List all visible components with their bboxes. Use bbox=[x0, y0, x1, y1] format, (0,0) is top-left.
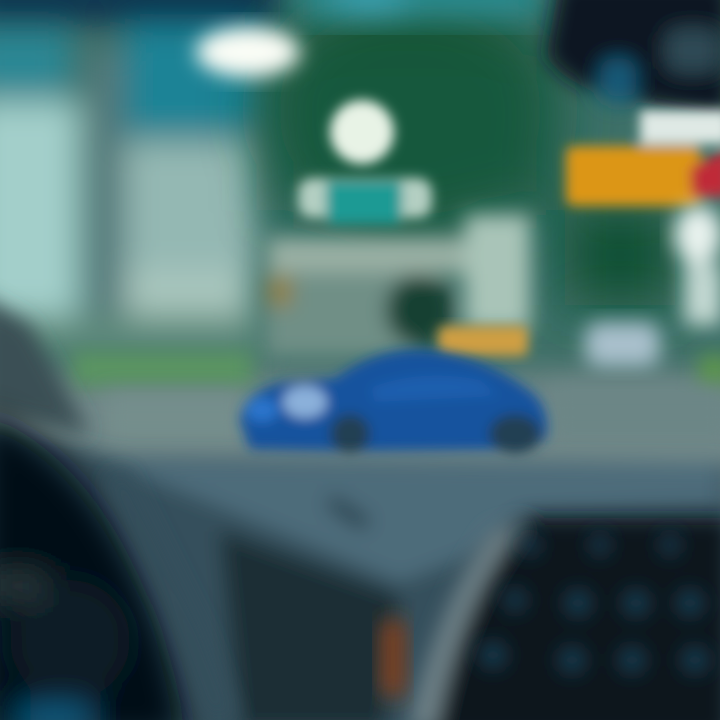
overhead white light bbox=[196, 27, 300, 77]
yellow sign behind car bbox=[438, 326, 528, 356]
round white street sign bbox=[330, 100, 394, 164]
left pillar grey shape bbox=[0, 295, 90, 435]
rear-view mirror dark shape bbox=[546, 0, 720, 118]
background: sky and street base bbox=[0, 0, 720, 505]
building: left facade bbox=[0, 0, 280, 355]
orange and red sign bbox=[566, 110, 720, 206]
console buttons bbox=[480, 535, 708, 673]
trees: green foliage bbox=[260, 0, 675, 305]
blue car bbox=[240, 349, 547, 454]
grass verges bbox=[72, 352, 720, 391]
road surface bbox=[105, 385, 720, 442]
distant white car and yellow sign bbox=[585, 322, 660, 367]
top blue sky strip bbox=[300, 0, 540, 20]
white glow right edge bbox=[674, 205, 720, 325]
steering wheel rim highlight bbox=[105, 470, 240, 720]
steering wheel bbox=[0, 412, 185, 720]
teal sign with white ends bbox=[298, 178, 432, 224]
gateway structure and distant buildings bbox=[265, 215, 530, 357]
orange reflection by console bbox=[380, 618, 406, 698]
centre console panel with buttons bbox=[408, 518, 720, 720]
dashboard bbox=[0, 425, 720, 720]
